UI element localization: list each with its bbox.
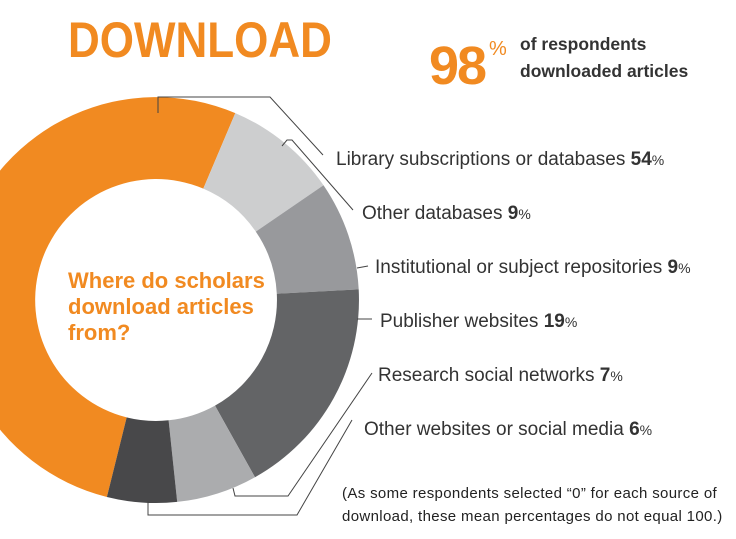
labels: Other databases 9%	[362, 203, 531, 224]
stat: 98% of respondents: 98	[429, 36, 486, 96]
stat: 98% of respondents: of respondents	[520, 34, 647, 54]
labels: Library subscriptions or databases 54%	[336, 149, 664, 170]
footnote: download, these mean percentages do not equal 100.)	[342, 508, 723, 525]
donut chart	[0, 97, 359, 503]
footnote	[342, 485, 723, 525]
center question: download articles	[68, 294, 254, 319]
center question: Where do scholars	[68, 268, 265, 293]
leader lines	[148, 97, 372, 515]
center question: from?	[68, 320, 130, 345]
footnote: (As some respondents selected “0” for each source of	[342, 485, 718, 502]
labels: Research social networks 7%	[378, 365, 623, 386]
title: DOWNLOAD	[68, 11, 332, 68]
stat: 98% of respondents: downloaded articles	[520, 61, 688, 81]
center question	[68, 268, 265, 345]
labels: Publisher websites 19%	[380, 311, 577, 332]
labels: Other websites or social media 6%	[364, 419, 652, 440]
labels	[336, 149, 691, 440]
stat: 98% of respondents	[429, 34, 688, 96]
labels: Institutional or subject repositories 9%	[375, 257, 691, 278]
stat: 98% of respondents: %	[489, 38, 507, 60]
